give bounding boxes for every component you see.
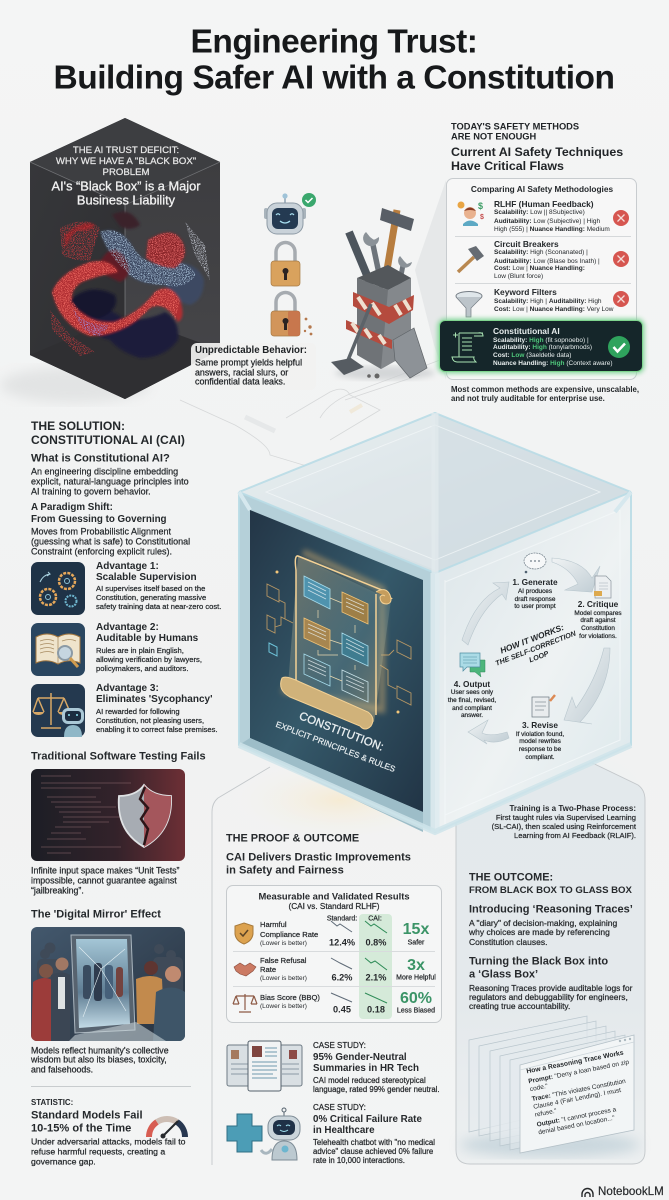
text: paradigm shift: Moves from Probabilistic Alignment bbox=[31, 526, 171, 536]
text: how a reasoning trace works: Prompt: "Deny a loan based on zip bbox=[528, 1059, 630, 1085]
step: critique: 2. Critique bbox=[578, 599, 618, 609]
table heading: Measurable and Validated Results bbox=[258, 890, 410, 901]
row: Circuit Breakers: Low (Blunt force) bbox=[494, 273, 543, 280]
step: revise: If violation found, bbox=[516, 731, 564, 738]
text: reasoning traces: Introducing ‘Reasoning Traces’ bbox=[469, 904, 633, 916]
case study: healthcare: 0% Critical Failure Rate bbox=[313, 1114, 422, 1125]
row: false refusal bbox=[233, 951, 435, 986]
case study: gender-neutral summaries: CAI model reduced stereotypical bbox=[313, 1076, 426, 1085]
row: harmful compliance: (Lower is better) bbox=[260, 940, 307, 947]
text: “jailbreaking”. bbox=[31, 886, 84, 896]
text: how a reasoning trace works: Trace: "This violates Constitution bbox=[531, 1078, 626, 1103]
text: two-phase training: Training is a Two-Phase Process: bbox=[509, 804, 636, 813]
row: bias score: 60% bbox=[400, 990, 432, 1007]
panel: Constitutional AI highlighted row: Scalability: High (fit sopnoebo) | bbox=[493, 337, 589, 344]
case study: healthcare: Telehealth chatbot with "no medical bbox=[313, 1138, 435, 1147]
callout: unpredictable behavior: Unpredictable Behavior: bbox=[195, 345, 307, 356]
row: bias score bbox=[233, 986, 435, 1021]
case study: gender-neutral summaries: CASE STUDY: bbox=[313, 1041, 366, 1050]
step: revise bbox=[516, 720, 564, 761]
panel: Constitutional AI highlighted row: Constitutional AI bbox=[493, 326, 560, 336]
advantage 1: Scalable Supervision bbox=[96, 572, 197, 583]
text: glass box bbox=[469, 956, 632, 1011]
text: glass box: a ‘Glass Box’ bbox=[469, 968, 538, 980]
step: generate: 1. Generate bbox=[512, 577, 558, 587]
step: revise: response to be bbox=[519, 746, 561, 753]
row: false refusal: 3x bbox=[407, 957, 425, 974]
text: how a reasoning trace works bbox=[526, 1050, 630, 1136]
callout: unpredictable behavior: Same prompt yields helpful bbox=[195, 358, 302, 368]
heading: The 'Digital Mirror' Effect bbox=[31, 908, 161, 920]
illustration: code and cracked shield bbox=[31, 769, 185, 861]
row: Keyword Filters: Cost: Low | Nuance Handling: Very Low bbox=[494, 306, 613, 313]
row: bias score: 0.45 bbox=[333, 1004, 351, 1014]
row: harmful compliance: Compliance Rate bbox=[260, 930, 318, 939]
panel: Constitutional AI highlighted row: Auditability: High (tonylarbmods) bbox=[493, 344, 592, 351]
panel: statistic: Under adversarial attacks, models fail to bbox=[31, 1137, 186, 1147]
row: RLHF: Scalability: Low || 8Subjective) bbox=[494, 209, 585, 216]
case study: healthcare bbox=[226, 1103, 435, 1165]
heading: how it works: THE SELF-CORRECTION bbox=[494, 629, 577, 668]
row: RLHF: High (555) | Nuance Handling: Medium bbox=[494, 226, 610, 233]
step: generate: AI produces bbox=[518, 588, 552, 595]
illustration: crowd in front of cracked mirror bbox=[31, 927, 185, 1041]
text: two-phase training: Learning from AI Feedback (RLAIF). bbox=[514, 831, 636, 840]
heading: black box liability: Business Liability bbox=[77, 193, 175, 208]
heading: how it works: HOW IT WORKS: bbox=[499, 622, 565, 655]
advantage 2: allowing verification by lawyers, bbox=[96, 655, 202, 664]
advantage 2 bbox=[31, 622, 202, 676]
step: output: and compliant bbox=[452, 705, 492, 712]
callout: unpredictable behavior bbox=[191, 343, 316, 390]
text: two-phase training: (SL-CAI), then scaled using Reinforcement bbox=[492, 822, 636, 831]
row: Keyword Filters bbox=[455, 283, 631, 320]
step: critique: draft against bbox=[580, 617, 616, 624]
icon: document bbox=[594, 576, 611, 598]
text: paradigm shift: A Paradigm Shift: bbox=[31, 502, 113, 513]
text: two-phase training bbox=[492, 804, 636, 840]
text: what is constitutional AI: What is Constitutional AI? bbox=[31, 452, 170, 464]
advantage 2: policymakers, and auditors. bbox=[96, 664, 188, 673]
step: critique: Model compares bbox=[574, 610, 622, 617]
row: RLHF: RLHF (Human Feedback) bbox=[494, 199, 594, 209]
panel: statistic: STATISTIC: bbox=[31, 1098, 73, 1107]
advantage 3: Eliminates 'Sycophancy' bbox=[96, 694, 212, 705]
step: revise: 3. Revise bbox=[522, 720, 558, 730]
row: Circuit Breakers: Scalability: High (Sconanated) | bbox=[494, 249, 588, 256]
advantage 2: Rules are in plain English, bbox=[96, 646, 184, 655]
heading: Traditional Software Testing Fails bbox=[31, 750, 206, 762]
icon: note and pencil bbox=[532, 695, 555, 717]
text: how a reasoning trace works: Output: "I cannot process a bbox=[536, 1106, 617, 1129]
step: generate: to user prompt bbox=[514, 603, 556, 610]
illustration: glowing constitution scroll bbox=[267, 552, 411, 729]
panel: the digital mirror effect bbox=[30, 908, 185, 1075]
text: glass box: Turning the Black Box into bbox=[469, 956, 608, 968]
row: RLHF: $ bbox=[478, 201, 483, 211]
arrows: self-correction loop bbox=[462, 558, 610, 744]
panel: Constitutional AI highlighted row: Cost: Low (3aeldetle data) bbox=[493, 352, 571, 359]
logo: NotebookLM: NotebookLM bbox=[598, 1185, 664, 1198]
advantage 1: Constitution, generating massive bbox=[96, 593, 206, 602]
label: section kicker: WHY WE HAVE A "BLACK BOX" bbox=[56, 156, 196, 167]
text: methods summary: and not truly auditable for enterprise use. bbox=[451, 394, 605, 403]
text: how a reasoning trace works: How a Reasoning Trace Works bbox=[526, 1050, 624, 1075]
label: section kicker bbox=[56, 145, 196, 178]
text: paradigm shift bbox=[31, 502, 190, 557]
row: Keyword Filters: Keyword Filters bbox=[494, 287, 557, 297]
step: generate: draft response bbox=[515, 596, 555, 603]
label: section kicker: THE AI TRUST DEFICIT: bbox=[73, 145, 179, 156]
solid blob base bbox=[52, 212, 204, 358]
text: paradigm shift: (guessing what is safe) to Constitutional bbox=[31, 536, 190, 546]
row: bias score: Less Biased bbox=[397, 1008, 435, 1014]
row: false refusal: (Lower is better) bbox=[260, 975, 307, 982]
row: bias score: Bias Score (BBQ) bbox=[260, 993, 320, 1002]
step: output bbox=[448, 679, 496, 719]
text: how a reasoning trace works: code." bbox=[529, 1083, 549, 1093]
text: methods summary bbox=[451, 385, 639, 403]
step: revise: model rewrites bbox=[519, 738, 561, 745]
row: Circuit Breakers: Auditability: Low (Blase bos Inath) | bbox=[494, 258, 600, 265]
heading: the proof and outcome: CAI Delivers Drastic Improvements bbox=[226, 851, 411, 863]
case study: healthcare: CASE STUDY: bbox=[313, 1103, 366, 1112]
text: how a reasoning trace works: Clause 4 (Fair Lending). I must bbox=[533, 1087, 622, 1111]
text: paradigm shift: From Guessing to Governing bbox=[31, 514, 167, 525]
text: Infinite input space makes “Unit Tests” bbox=[31, 866, 179, 876]
table heading: Comparing AI Safety Methodologies bbox=[471, 184, 613, 194]
panel: statistic: 10-15% of the Time bbox=[31, 1122, 131, 1134]
step: generate bbox=[512, 577, 558, 610]
case study: healthcare: rate in 10,000 interactions. bbox=[313, 1156, 405, 1165]
row: bias score: (Lower is better) bbox=[260, 1003, 307, 1010]
text: and falsehoods. bbox=[31, 1065, 93, 1075]
heading: black box liability bbox=[51, 179, 200, 208]
heading: THE OUTCOME: bbox=[469, 872, 553, 884]
text: two-phase training: First taught rules via Supervised Learning bbox=[496, 813, 636, 822]
advantage 1 bbox=[31, 561, 221, 615]
step: output: answer. bbox=[461, 712, 483, 719]
case study: healthcare: advice" clause achieved 0% failure bbox=[313, 1147, 433, 1156]
text: glass box: Reasoning Traces provide auditable logs for bbox=[469, 983, 632, 993]
callout: unpredictable behavior: answers, racial slurs, or bbox=[195, 368, 288, 378]
row: false refusal: 6.2% bbox=[332, 972, 352, 982]
icon: gauge bbox=[146, 1116, 188, 1138]
panel: statistic: refuse harmful requests, creating a bbox=[31, 1147, 165, 1157]
advantage 3: Advantage 3: bbox=[96, 683, 159, 694]
panel: black box problem bbox=[30, 118, 220, 399]
text: glass box: regulators and debuggability for engineers, bbox=[469, 992, 628, 1002]
heading: the solution: THE SOLUTION: bbox=[31, 419, 125, 433]
heading: the proof and outcome: in Safety and Fairness bbox=[226, 864, 344, 876]
icon: chat bubbles bbox=[460, 653, 485, 677]
heading: black box liability: AI's “Black Box” is a Major bbox=[52, 179, 200, 194]
table heading: (CAI vs. Standard RLHF) bbox=[288, 902, 380, 911]
text bbox=[31, 866, 180, 896]
panel: statistic bbox=[31, 1086, 191, 1169]
panel: the outcome bbox=[468, 872, 633, 1011]
heading: the solution bbox=[31, 419, 185, 447]
panel: measurable results table bbox=[226, 885, 442, 1023]
text: what is constitutional AI bbox=[30, 452, 189, 497]
step: critique: Constitution bbox=[581, 625, 615, 632]
panel: traditional software testing fails bbox=[31, 750, 206, 896]
case study: gender-neutral summaries: Summaries in HR Tech bbox=[313, 1063, 419, 1074]
text: Models reflect humanity's collective bbox=[31, 1046, 169, 1056]
row: RLHF bbox=[458, 199, 629, 233]
text bbox=[30, 1046, 169, 1075]
row: Circuit Breakers: Circuit Breakers bbox=[494, 239, 559, 249]
panel: measurable results table: CAI: bbox=[368, 916, 382, 922]
icon: speech bubble bbox=[524, 553, 546, 573]
text: reasoning traces: why choices are made by referencing bbox=[469, 927, 610, 937]
text: impossible, cannot guarantee against bbox=[31, 876, 177, 886]
row: Circuit Breakers: Cost: Low | Nuance Handling: bbox=[494, 265, 585, 272]
title bbox=[54, 23, 614, 96]
text: glass box: creating true accountability. bbox=[469, 1001, 570, 1011]
speckle highlights bbox=[50, 222, 210, 356]
row: harmful compliance: Safer bbox=[408, 940, 424, 946]
row: harmful compliance: 15x bbox=[403, 921, 429, 938]
text: what is constitutional AI: An engineering discipline embedding bbox=[31, 466, 178, 476]
column labels: Standard: bbox=[327, 916, 357, 922]
step: critique: for violations. bbox=[579, 633, 617, 640]
label: section kicker: PROBLEM bbox=[103, 167, 149, 178]
text: paradigm shift: Constraint (enforcing explicit rules). bbox=[31, 546, 172, 556]
text: reasoning traces: Constitution clauses. bbox=[469, 937, 547, 947]
icon: medical cross and robot bbox=[226, 1108, 300, 1160]
cube faces bbox=[239, 413, 631, 832]
case study: gender-neutral summaries: 95% Gender-Neutral bbox=[313, 1052, 407, 1063]
heading: today's safety methods bbox=[451, 121, 623, 173]
illustration: dark cube with chaotic particle cloud bbox=[30, 118, 220, 399]
advantage 3: AI rewarded for following bbox=[96, 707, 180, 716]
advantage 2: Advantage 2: bbox=[96, 622, 159, 633]
step: revise: compliant. bbox=[525, 754, 555, 761]
row: false refusal: More Helpful bbox=[396, 974, 436, 982]
case study: gender-neutral summaries: language, rated 99% gender neutral. bbox=[313, 1085, 440, 1094]
panel: statistic: governance gap. bbox=[31, 1157, 96, 1167]
panel: the solution bbox=[30, 419, 221, 737]
panel: the outcome: FROM BLACK BOX TO GLASS BOX bbox=[469, 885, 632, 896]
table heading bbox=[258, 890, 410, 911]
advantage 3 bbox=[31, 683, 218, 737]
heading: the proof and outcome bbox=[226, 833, 411, 876]
step: output: 4. Output bbox=[454, 679, 490, 689]
step: output: the final, revised, bbox=[448, 697, 496, 704]
row: harmful compliance: 0.8% bbox=[366, 937, 386, 947]
text: wisdom but also its biases, toxicity, bbox=[31, 1055, 167, 1065]
row: bias score: 0.18 bbox=[367, 1004, 385, 1014]
panel: statistic: Standard Models Fail bbox=[31, 1109, 143, 1121]
row: harmful compliance: 12.4% bbox=[329, 937, 355, 947]
callout: unpredictable behavior: confidential data leaks. bbox=[195, 377, 285, 387]
text: reasoning traces: A "diary" of decision-making, explaining bbox=[469, 918, 617, 928]
row: Circuit Breakers bbox=[455, 236, 631, 284]
row: false refusal: False Refusal bbox=[260, 956, 306, 965]
title: Building Safer AI with a Constitution bbox=[54, 59, 614, 96]
text: methods summary: Most common methods are expensive, unscalable, bbox=[451, 385, 639, 394]
heading: how it works: LOOP bbox=[528, 649, 550, 664]
text: what is constitutional AI: explicit, natural-language principles into bbox=[31, 476, 189, 486]
row: Keyword Filters: Scalability: High | Auditability: High bbox=[494, 298, 602, 305]
row: harmful compliance bbox=[234, 920, 430, 947]
case study: gender-neutral summaries bbox=[226, 1040, 440, 1094]
heading: today's safety methods: ARE NOT ENOUGH bbox=[451, 131, 536, 141]
caption: constitution on cube face: EXPLICIT PRINCIPLES & RULES bbox=[274, 719, 397, 774]
step: output: User sees only bbox=[451, 689, 493, 696]
row: harmful compliance: Harmful bbox=[260, 920, 287, 929]
advantage 2: Auditable by Humans bbox=[96, 633, 198, 644]
heading: today's safety methods: TODAY'S SAFETY METHODS bbox=[451, 121, 579, 131]
step: critique bbox=[574, 599, 622, 640]
advantage 3: Constitution, not pleasing users, bbox=[96, 716, 204, 725]
case study: healthcare: in Healthcare bbox=[313, 1125, 375, 1136]
advantage 1: Advantage 1: bbox=[96, 561, 159, 572]
caption: constitution on cube face: CONSTITUTION: bbox=[297, 710, 385, 754]
green highlight column bbox=[359, 914, 392, 1019]
advantage 1: AI supervises itself based on the bbox=[96, 584, 205, 593]
title: Engineering Trust: bbox=[191, 23, 477, 60]
text: how a reasoning trace works: denial based on location..." bbox=[538, 1115, 615, 1136]
panel: Constitutional AI highlighted row bbox=[439, 320, 643, 372]
text: reasoning traces bbox=[468, 904, 633, 947]
panel: Constitutional AI highlighted row: Nuance Handling: High (Context aware) bbox=[493, 360, 613, 367]
advantage 1: safety training data at near-zero cost. bbox=[96, 602, 221, 611]
heading: the proof and outcome: THE PROOF & OUTCOME bbox=[226, 833, 359, 845]
text: how a reasoning trace works: refuse." bbox=[534, 1108, 557, 1119]
row: false refusal: Rate bbox=[260, 965, 276, 974]
heading: today's safety methods: Current AI Safety Techniques bbox=[451, 145, 623, 159]
row: false refusal: 2.1% bbox=[366, 972, 386, 982]
row: RLHF: $ bbox=[480, 214, 484, 221]
text: what is constitutional AI: AI training to govern behavior. bbox=[31, 486, 151, 496]
advantage 3: enabling it to correct false premises. bbox=[96, 725, 218, 734]
panel: comparing AI safety methodologies bbox=[446, 178, 637, 380]
row: RLHF: Auditability: Low (Subjective) | High bbox=[494, 218, 600, 225]
heading: the solution: CONSTITUTIONAL AI (CAI) bbox=[31, 433, 185, 447]
icon: resume documents bbox=[226, 1040, 302, 1092]
heading: today's safety methods: Have Critical Flaws bbox=[451, 159, 564, 173]
